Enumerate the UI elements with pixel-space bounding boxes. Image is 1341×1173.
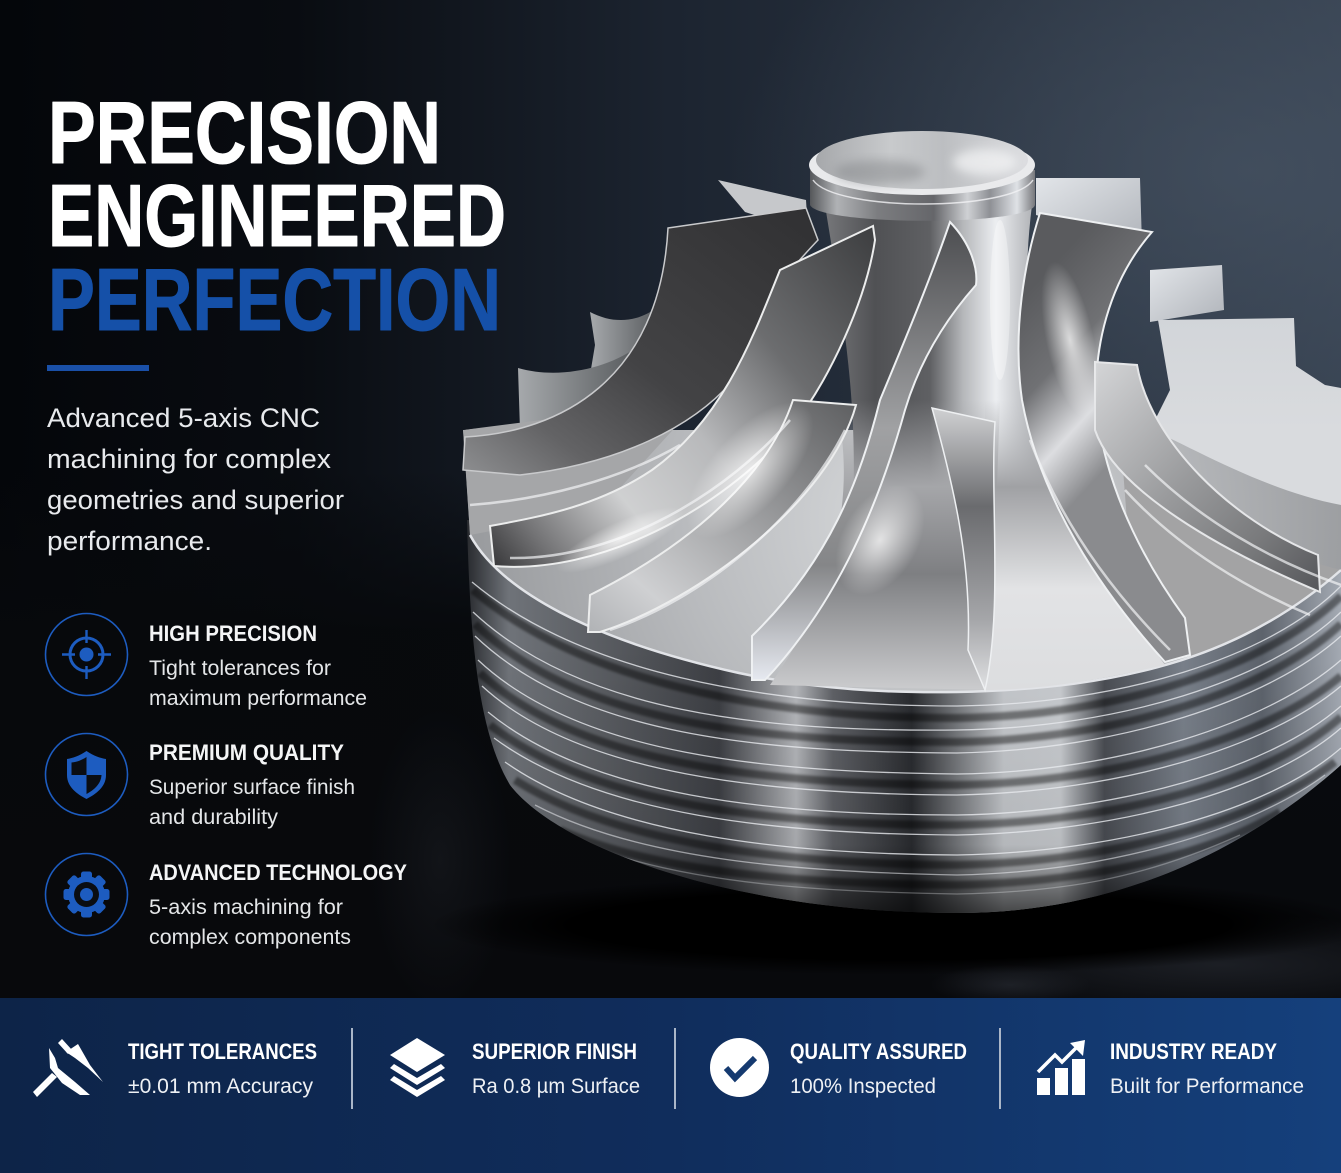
blade: large right [1018,213,1190,662]
stat: tight tolerances [33,1039,317,1098]
feature: premium quality [46,734,355,829]
blade: center sweep [752,222,976,680]
icon: calipers [33,1039,103,1097]
feature: high precision [46,614,367,710]
icon: layers [390,1038,445,1097]
icon: check circle [710,1038,769,1097]
lower hub sectors [770,400,1165,690]
blade: large front left [490,226,875,567]
stat: superior finish: Ra 0.8 µm Surface [472,1074,640,1098]
top face floor [460,400,1341,700]
fillet highlights [470,420,1341,650]
feature: high precision: Tight tolerances for [149,656,331,680]
stat: superior finish: SUPERIOR FINISH [472,1039,637,1064]
divider [999,1028,1001,1109]
stat: superior finish [390,1038,640,1098]
feature: premium quality: Superior surface finish [149,775,355,799]
central hub cone [825,205,1060,520]
intro paragraph: machining for complex [47,444,332,474]
stat: industry ready: Built for Performance [1110,1074,1304,1098]
accent rule [47,365,149,371]
feature: advanced technology: 5-axis machining for [149,895,343,919]
divider [351,1028,353,1109]
blade: front lower left [588,400,856,632]
icon: growth chart [1037,1040,1085,1095]
feature: high precision: HIGH PRECISION [149,621,317,646]
stat: tight tolerances: TIGHT TOLERANCES [128,1039,317,1064]
divider [674,1028,676,1109]
impeller base with grooves [460,510,1341,920]
stat: tight tolerances: ±0.01 mm Accuracy [128,1074,313,1098]
stat: industry ready [1037,1039,1304,1098]
title: PERFECTION [48,250,501,349]
feature: premium quality: PREMIUM QUALITY [149,740,344,765]
feature: high precision: maximum performance [149,686,367,710]
title [48,83,506,349]
back blades [518,178,1341,430]
icon: gear [46,854,128,936]
feature: advanced technology: ADVANCED TECHNOLOGY [149,860,407,885]
title: PRECISION [48,83,441,182]
title: ENGINEERED [48,166,506,265]
icon: target [46,614,128,696]
hub neck [810,170,1035,221]
stat: industry ready: INDUSTRY READY [1110,1039,1277,1064]
intro paragraph: geometries and superior [47,485,344,515]
stat: quality assured: QUALITY ASSURED [790,1039,967,1064]
impeller: machined metal part [460,131,1341,920]
surface highlights [549,220,1110,611]
blade: back left [463,208,818,475]
blade: right lower [1095,362,1320,592]
intro paragraph: performance. [47,526,212,556]
intro paragraph [47,403,344,556]
rim highlight [470,535,1341,692]
bottom band [0,998,1341,1173]
blade: short center [932,408,995,690]
stat: quality assured [710,1038,967,1098]
feature: advanced technology: complex components [149,925,351,949]
feature: premium quality: and durability [149,805,278,829]
feature: advanced technology [46,854,407,949]
hub cap [809,131,1035,204]
intro paragraph: Advanced 5-axis CNC [47,403,320,433]
icon: shield [46,734,128,816]
stat: quality assured: 100% Inspected [790,1074,936,1098]
